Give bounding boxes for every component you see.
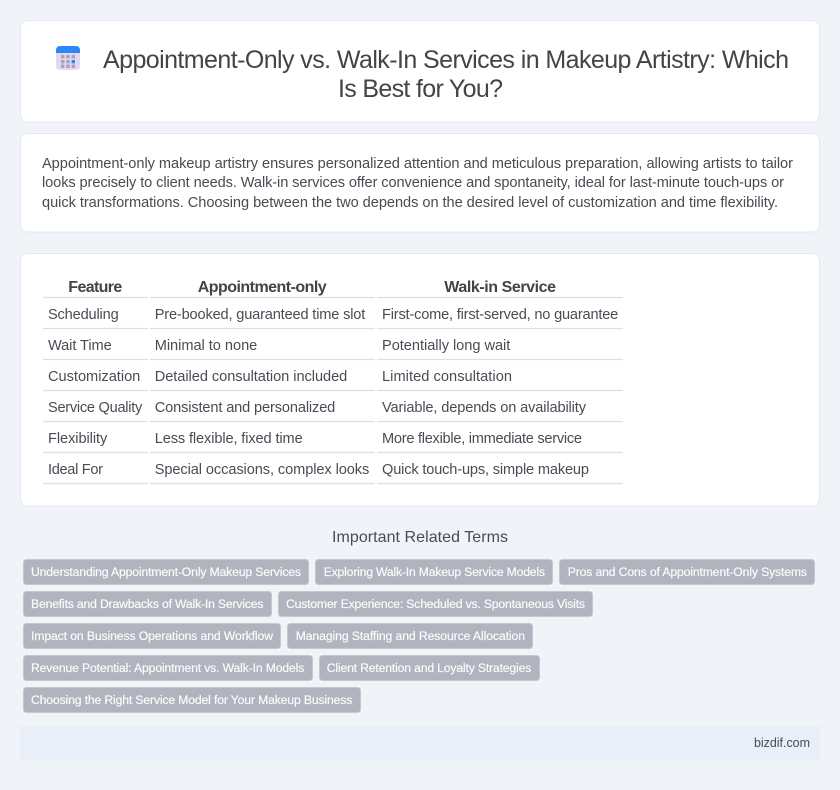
table row: service quality: Variable, depends on availability — [382, 400, 587, 416]
table header row — [68, 279, 556, 296]
intro text block: quick transformations. Choosing between the two depends on the desired level of customization and time flexibility. — [42, 195, 778, 211]
table row: scheduling: Pre-booked, guaranteed time slot — [155, 307, 365, 323]
table row: wait time: Minimal to none — [155, 338, 257, 354]
title — [103, 46, 789, 103]
panel: comparison table — [20, 254, 820, 506]
table row: flexibility: Flexibility — [48, 431, 108, 447]
intro text block: Appointment-only makeup artistry ensures personalized attention and meticulous preparation, allowing artists to tailor — [42, 156, 793, 172]
panel: intro — [20, 134, 820, 232]
title: Appointment-Only vs. Walk-In Services in Makeup Artistry: Which — [103, 46, 789, 74]
tag: impact on operations: Impact on Business Operations and Workflow — [31, 629, 273, 643]
table row: wait time — [48, 338, 510, 354]
intro text block: looks precisely to client needs. Walk-in services offer convenience and spontaneity, ideal for last-minute touch-ups or — [42, 175, 784, 191]
table row: scheduling: First-come, first-served, no guarantee — [382, 307, 618, 323]
tag: choosing the right model — [24, 688, 360, 712]
icon: calendar — [56, 46, 80, 70]
tag: client retention: Client Retention and Loyalty Strategies — [327, 661, 531, 675]
table row: ideal for: Quick touch-ups, simple makeup — [382, 462, 589, 478]
title: Is Best for You? — [338, 75, 503, 103]
table row: flexibility — [48, 431, 582, 447]
table header row: Walk-in Service — [444, 279, 556, 296]
heading: related terms: Important Related Terms — [332, 529, 508, 546]
tag: understanding appointment-only — [24, 560, 308, 584]
table row: scheduling: Scheduling — [48, 307, 119, 323]
footer bar — [20, 726, 820, 760]
tag: revenue potential — [24, 656, 312, 680]
table row: ideal for: Special occasions, complex looks — [155, 462, 369, 478]
tag: managing staffing: Managing Staffing and Resource Allocation — [296, 629, 525, 643]
tag: choosing the right model: Choosing the Right Service Model for Your Makeup Business — [31, 693, 352, 707]
table row: wait time: Wait Time — [48, 338, 112, 354]
tag: revenue potential: Revenue Potential: Appointment vs. Walk-In Models — [31, 661, 304, 675]
table row: customization: Limited consultation — [382, 369, 512, 385]
table row: customization: Customization — [48, 369, 140, 385]
table header row: Feature — [68, 279, 122, 296]
tag: understanding appointment-only: Understanding Appointment-Only Makeup Services — [31, 565, 301, 579]
table row: service quality — [48, 400, 587, 416]
table row: ideal for: Ideal For — [48, 462, 103, 478]
table row: flexibility: Less flexible, fixed time — [155, 431, 303, 447]
tag: pros and cons: Pros and Cons of Appointment-Only Systems — [568, 565, 807, 579]
tag: customer experience: Customer Experience: Scheduled vs. Spontaneous Visits — [286, 597, 585, 611]
tag: benefits and drawbacks — [24, 592, 272, 616]
tag: client retention — [320, 656, 540, 680]
related term tags — [24, 560, 814, 712]
panel: header card — [20, 20, 820, 122]
tag: exploring walk-in — [316, 560, 552, 584]
tag: exploring walk-in: Exploring Walk-In Makeup Service Models — [324, 565, 545, 579]
table row: customization: Detailed consultation included — [155, 369, 347, 385]
intro text block — [42, 156, 793, 211]
table row: ideal for — [48, 462, 589, 478]
table row: scheduling — [48, 307, 618, 323]
tag: managing staffing — [288, 624, 532, 648]
table row: service quality: Service Quality — [48, 400, 143, 416]
table row: flexibility: More flexible, immediate service — [382, 431, 582, 447]
table row: customization — [48, 369, 512, 385]
tag: benefits and drawbacks: Benefits and Drawbacks of Walk-In Services — [31, 597, 264, 611]
tag: customer experience — [278, 592, 592, 616]
table row: service quality: Consistent and personalized — [155, 400, 335, 416]
table header row: Appointment-only — [198, 279, 327, 296]
tag: pros and cons — [560, 560, 814, 584]
table row: wait time: Potentially long wait — [382, 338, 510, 354]
footer source: bizdif.com — [754, 736, 810, 750]
tag: impact on operations — [24, 624, 280, 648]
